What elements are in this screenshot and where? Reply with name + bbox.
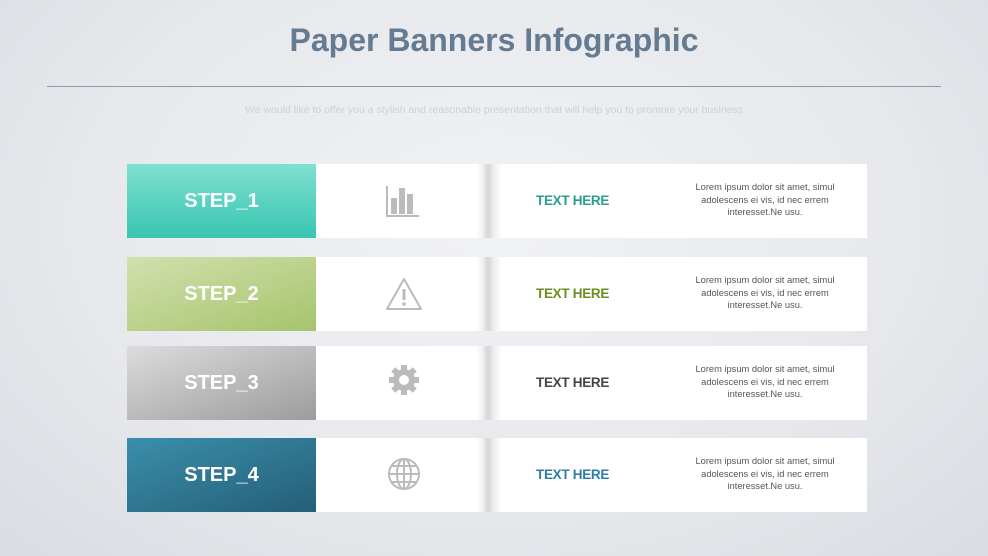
heading 1: TEXT HERE [536,193,609,208]
row 1 [127,164,867,238]
icon: warning [386,278,422,310]
step 3 label: STEP_3 [184,372,259,394]
icon: gear [389,365,419,395]
icon: bar chart [386,186,419,217]
subtitle: We would like to offer you a stylish and reasonable presentation that will help you to promote your business [245,104,743,116]
step 3 label [127,346,316,420]
body 4: Lorem ipsum dolor sit amet, simul adolescens ei vis, id nec errem interesset.Ne usu. [696,456,834,491]
heading 2: TEXT HERE [536,286,609,301]
row 3 [127,346,867,420]
title: Paper Banners Infographic [290,22,698,58]
heading 4: TEXT HERE [536,467,609,482]
step 2 label [127,257,316,331]
icon: globe [388,458,420,490]
step 4 label: STEP_4 [184,464,259,486]
step 1 label: STEP_1 [184,190,259,212]
step 2 label: STEP_2 [184,283,259,305]
body 3: Lorem ipsum dolor sit amet, simul adolescens ei vis, id nec errem interesset.Ne usu. [696,364,834,399]
body 2: Lorem ipsum dolor sit amet, simul adolescens ei vis, id nec errem interesset.Ne usu. [696,275,834,310]
heading 3: TEXT HERE [536,375,609,390]
row 4 [127,438,867,512]
body 1: Lorem ipsum dolor sit amet, simul adolescens ei vis, id nec errem interesset.Ne usu. [696,182,834,217]
step 1 label [127,164,316,238]
step 4 label [127,438,316,512]
row 2 [127,257,867,331]
